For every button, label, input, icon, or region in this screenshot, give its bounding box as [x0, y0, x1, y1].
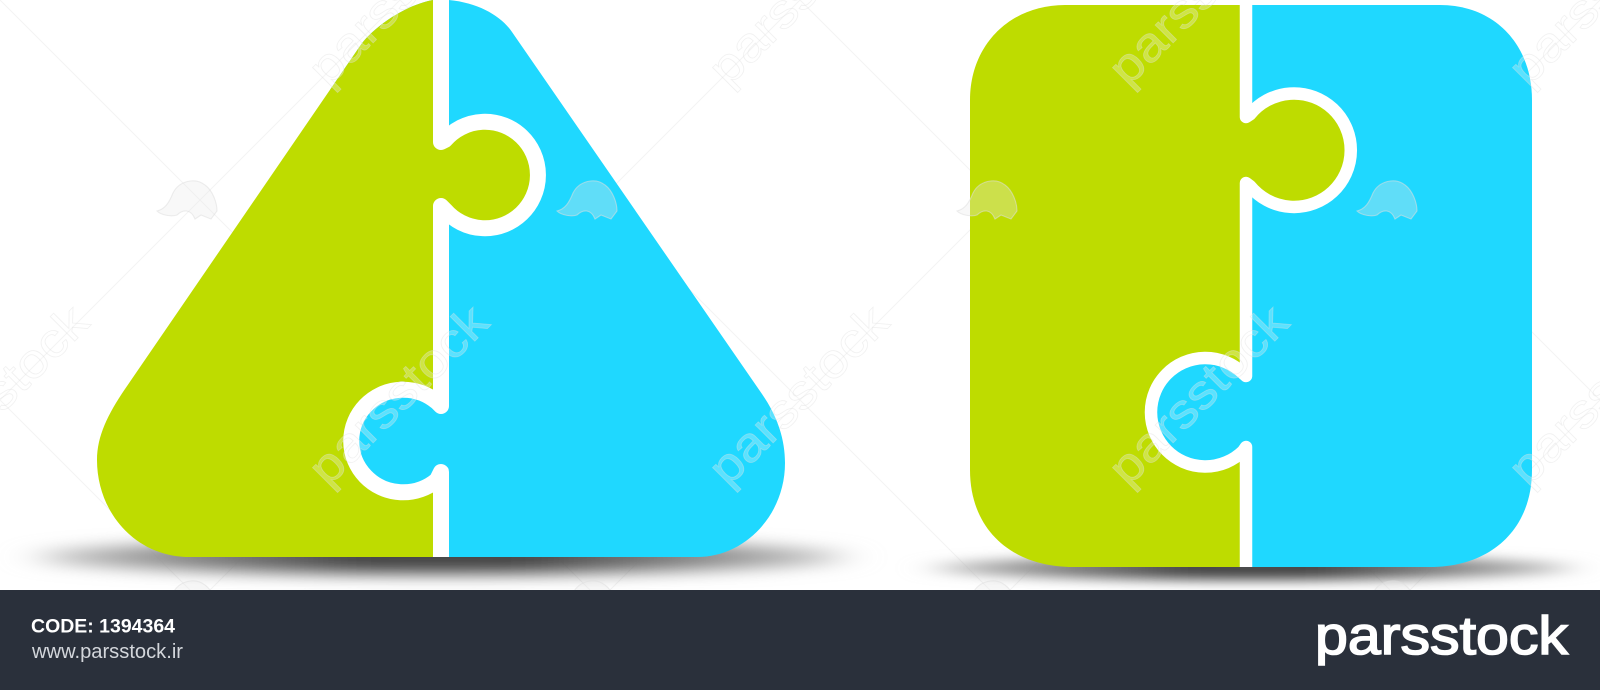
- website url: www.parsstock.ir: [31, 641, 183, 663]
- shadow: square: [933, 556, 1573, 580]
- watermark text: parsstock: [1098, 294, 1300, 496]
- shadow: triangle: [36, 540, 846, 574]
- parsstock logo: parsstock: [1315, 606, 1569, 666]
- code label: CODE: 1394364: [31, 616, 175, 638]
- watermark text: parsstock: [298, 294, 500, 496]
- puzzle: rounded square: [960, 0, 1550, 575]
- square seam: [1151, 0, 1351, 575]
- square piece: blue: [1157, 5, 1532, 567]
- square piece: green: [960, 0, 1351, 575]
- triangle piece: blue: [330, 0, 800, 560]
- footer bar: [0, 590, 1600, 690]
- triangle seam: [351, 0, 538, 565]
- triangle piece: green: [80, 0, 538, 560]
- watermark text: parsstock: [698, 294, 900, 496]
- puzzle: triangle: [80, 0, 800, 565]
- watermark bull icons: [157, 181, 1417, 613]
- watermark text: [0, 0, 1600, 496]
